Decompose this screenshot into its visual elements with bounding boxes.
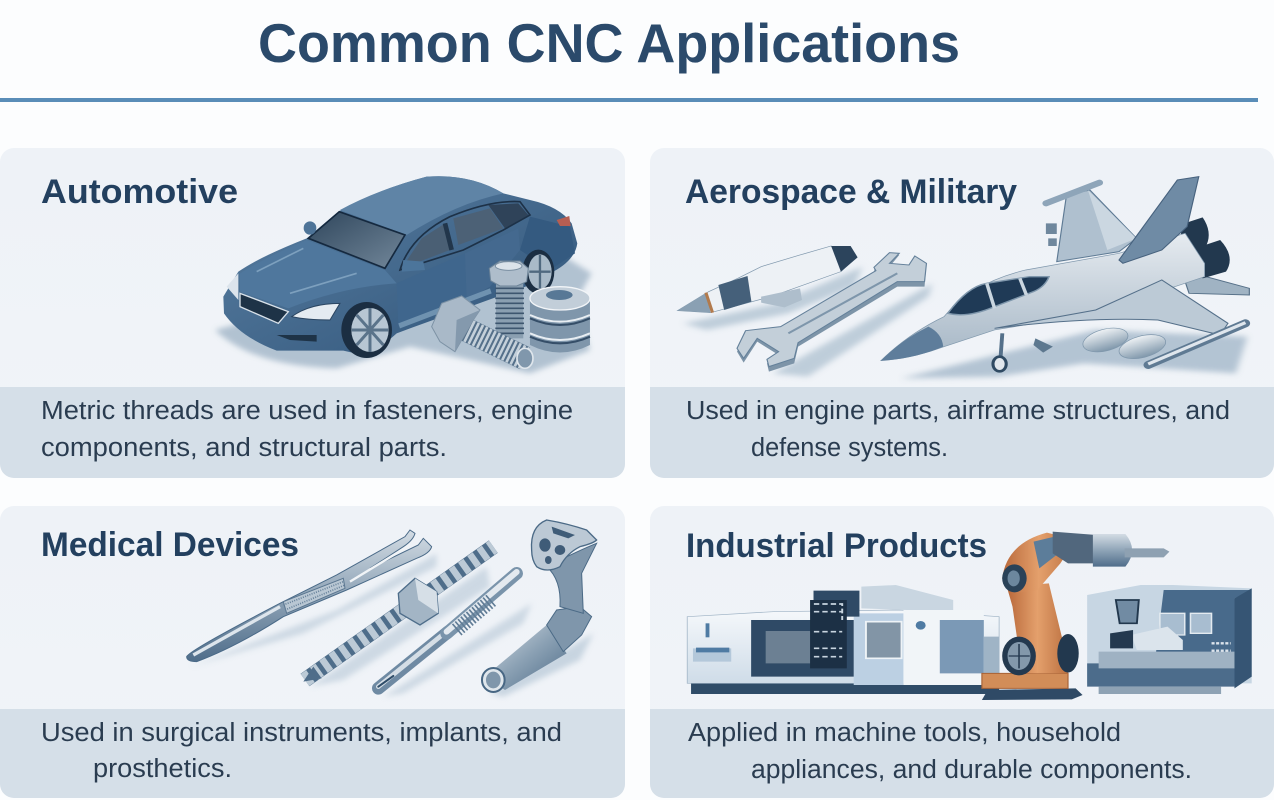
caption text (688, 719, 1192, 784)
panel: automotive (0, 148, 625, 478)
heading: Automotive (41, 173, 238, 211)
panel: aerospace and military (650, 148, 1274, 478)
caption band (0, 709, 625, 798)
heading: Aerospace & Military (685, 173, 1017, 211)
caption text (686, 397, 1230, 462)
panel: medical devices (0, 506, 625, 798)
caption text (41, 397, 573, 462)
illustration: missile, wrench and fighter jet (678, 177, 1249, 378)
caption band (650, 387, 1274, 478)
caption line 1: Used in surgical instruments, implants, and (41, 719, 562, 747)
illustration: surgical instruments and implants (187, 520, 597, 697)
caption band (650, 709, 1274, 798)
panel: industrial products (650, 506, 1274, 798)
panel background (0, 506, 625, 798)
caption band (0, 387, 625, 478)
caption line 2: components, and structural parts. (41, 434, 447, 462)
illustration: CNC machines and robot arm (687, 532, 1252, 700)
caption text (41, 719, 562, 783)
title underline (0, 98, 1258, 102)
caption line 1: Applied in machine tools, household (688, 719, 1121, 747)
panel background (0, 148, 625, 478)
caption line 2: prosthetics. (93, 755, 232, 783)
heading: Industrial Products (686, 527, 987, 565)
caption line 1: Used in engine parts, airframe structures, and (686, 397, 1230, 425)
panel background (650, 506, 1274, 798)
heading: Medical Devices (41, 526, 299, 564)
illustration: car with bolts and washers (215, 176, 592, 373)
caption line 2: appliances, and durable components. (751, 756, 1192, 784)
panel background (650, 148, 1274, 478)
caption line 2: defense systems. (751, 434, 948, 462)
title: Common CNC Applications (258, 12, 960, 74)
caption line 1: Metric threads are used in fasteners, engine (41, 397, 573, 425)
